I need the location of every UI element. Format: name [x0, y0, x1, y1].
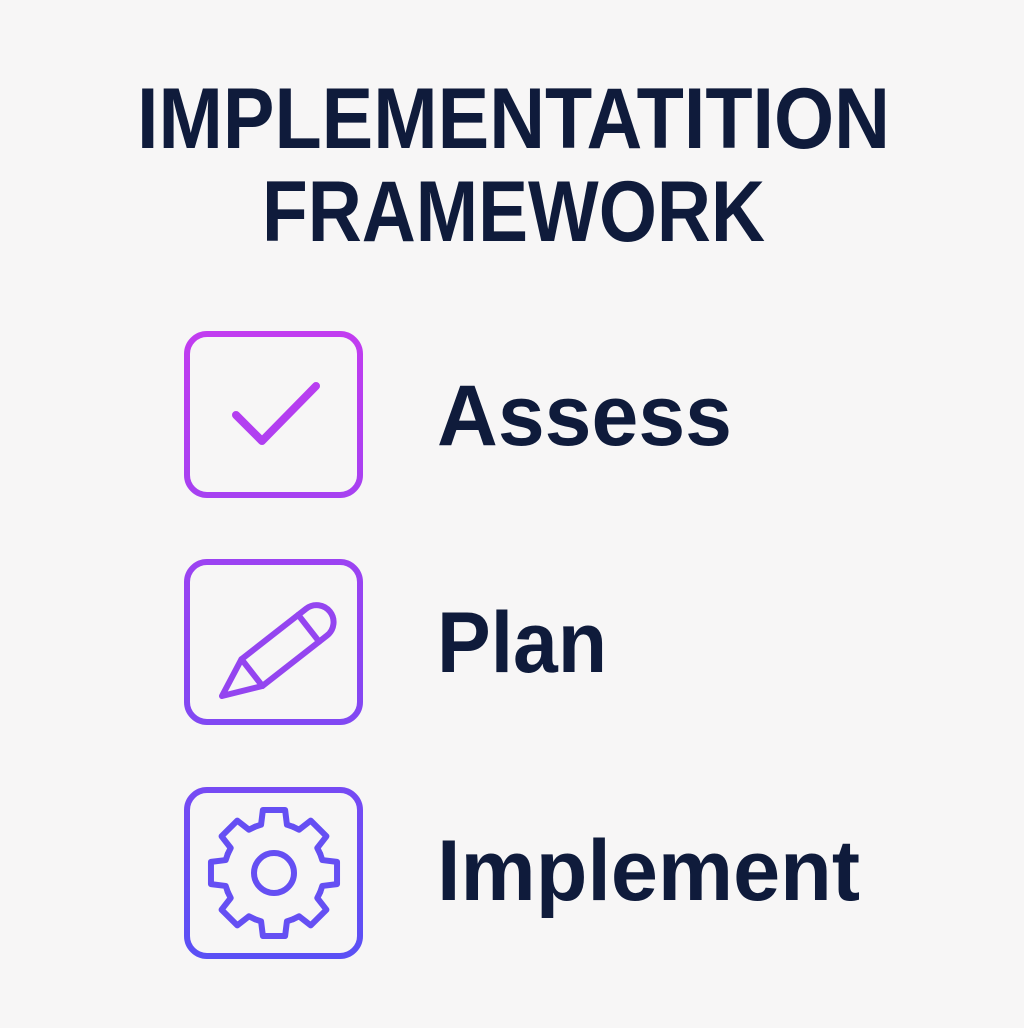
- label: Plan: Plan: [437, 595, 607, 691]
- step: implement: [187, 790, 860, 956]
- icon: gear box: [187, 790, 360, 956]
- icon: pencil box: [187, 562, 360, 722]
- step: plan: [187, 562, 607, 722]
- title: [137, 71, 890, 260]
- label: Implement: Implement: [437, 823, 860, 919]
- title: IMPLEMENTATITION: [137, 71, 890, 167]
- step: assess: [187, 334, 732, 495]
- icon: checkmark box: [187, 334, 360, 495]
- label: Assess: Assess: [437, 368, 732, 464]
- title: FRAMEWORK: [262, 164, 765, 260]
